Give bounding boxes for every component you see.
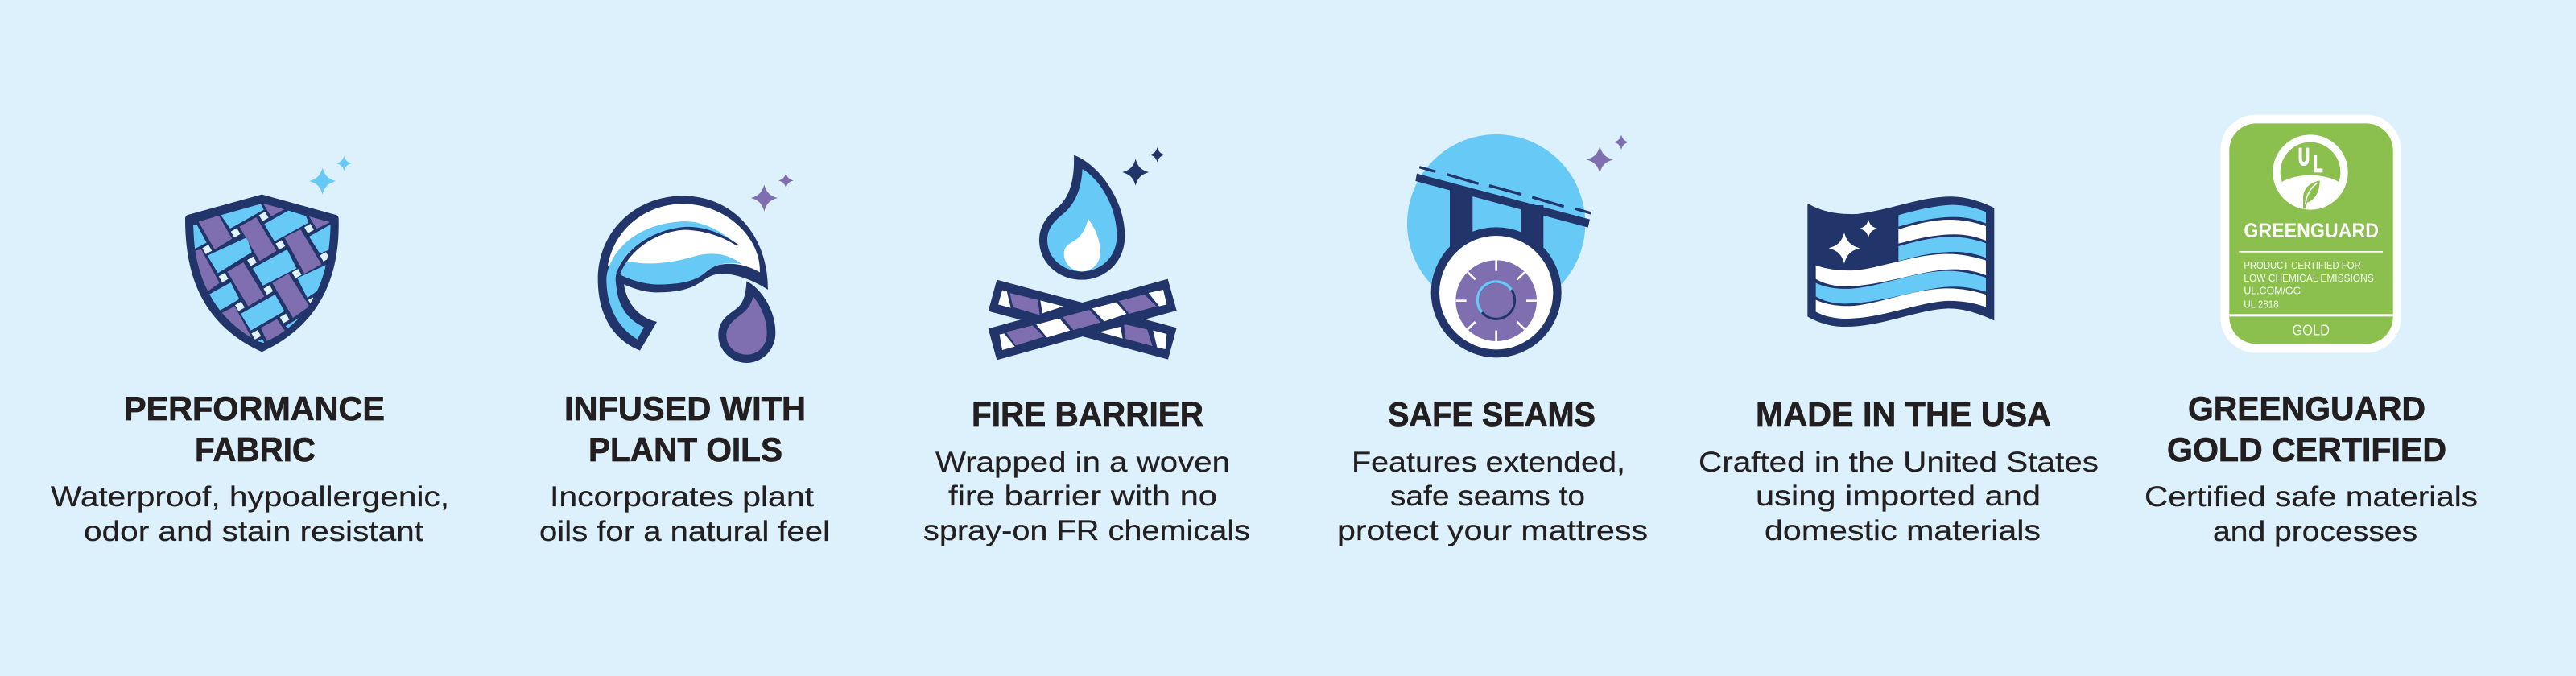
icon: flame over crossed logs: [989, 147, 1177, 360]
icon: greenguard gold badge: [2220, 115, 2401, 352]
icon: greenguard gold badge: UL 2818: [2244, 298, 2279, 310]
infographic: mattress features: [51, 114, 2477, 547]
heading: infused with plant oils: PLANT OILS: [588, 431, 782, 468]
text: fire barrier description: spray-on FR chemicals: [923, 515, 1250, 546]
heading: performance fabric: PERFORMANCE: [124, 390, 385, 427]
heading: greenguard gold certified: [2167, 390, 2446, 468]
text: greenguard description: [2145, 481, 2478, 547]
text: safe seams description: Features extended,: [1352, 447, 1625, 478]
icon: leaf and oil drop: [598, 173, 794, 363]
panel: greenguard gold certified: [2145, 115, 2478, 547]
heading: made in the usa: MADE IN THE USA: [1756, 395, 2051, 433]
text: made in the usa description: domestic materials: [1765, 515, 2041, 546]
heading: greenguard gold certified: GREENGUARD: [2188, 390, 2425, 427]
text: made in the usa description: Crafted in the United States: [1699, 447, 2099, 478]
text: safe seams description: [1337, 447, 1648, 546]
text: safe seams description: protect your mattress: [1337, 515, 1648, 546]
panel: fire barrier: [923, 147, 1250, 546]
heading: performance fabric: [124, 390, 385, 468]
text: safe seams description: safe seams to: [1390, 480, 1585, 512]
icon: greenguard gold badge: UL.COM/GG: [2244, 284, 2301, 296]
panel: infused with plant oils: [539, 173, 830, 547]
heading: safe seams: SAFE SEAMS: [1388, 395, 1596, 433]
text: made in the usa description: using imported and: [1756, 480, 2041, 512]
heading: performance fabric: FABRIC: [195, 431, 316, 468]
text: fire barrier description: fire barrier with no: [948, 480, 1217, 512]
text: performance fabric description: odor and stain resistant: [84, 516, 423, 547]
text: fire barrier description: Wrapped in a woven: [935, 447, 1230, 478]
text: plant oils description: oils for a natural feel: [539, 516, 830, 547]
text: performance fabric description: Waterproof, hypoallergenic,: [51, 481, 449, 513]
icon: greenguard gold badge: L: [2313, 150, 2322, 177]
icon: greenguard gold badge: LOW CHEMICAL EMISSIONS: [2244, 272, 2374, 284]
text: greenguard description: and processes: [2213, 516, 2417, 547]
icon: greenguard gold badge: GREENGUARD: [2244, 220, 2379, 242]
heading: infused with plant oils: [564, 390, 806, 468]
text: made in the usa description: [1699, 447, 2099, 546]
text: fire barrier description: [923, 447, 1250, 546]
heading: infused with plant oils: INFUSED WITH: [564, 390, 806, 427]
heading: fire barrier: FIRE BARRIER: [972, 395, 1203, 433]
text: plant oils description: [539, 481, 830, 547]
icon: seam and thread spool: [1407, 134, 1629, 357]
heading: greenguard gold certified: GOLD CERTIFIED: [2167, 431, 2446, 468]
text: greenguard description: Certified safe materials: [2145, 481, 2478, 513]
panel: performance fabric: [51, 156, 449, 547]
icon: woven shield: [185, 156, 352, 352]
icon: waving flag: [1807, 196, 1994, 327]
icon: greenguard gold badge: GOLD: [2292, 322, 2330, 339]
panel: made in the usa: [1699, 196, 2099, 546]
icon: greenguard gold badge: U: [2298, 144, 2310, 171]
text: performance fabric description: [51, 481, 449, 547]
text: plant oils description: Incorporates plant: [550, 481, 814, 513]
icon: greenguard gold badge: PRODUCT CERTIFIED FOR: [2244, 259, 2361, 271]
panel: safe seams: [1337, 134, 1648, 546]
